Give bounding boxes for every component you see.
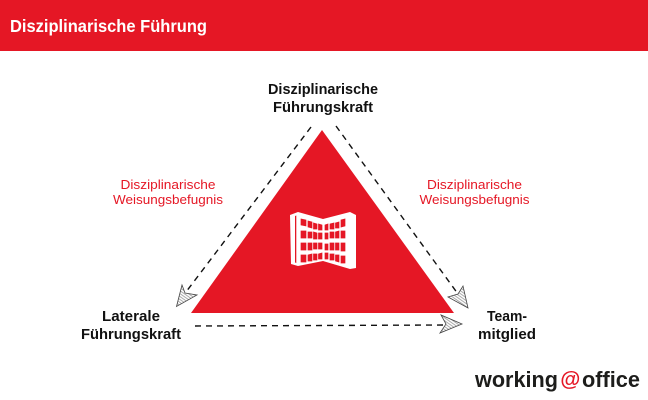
heading: left node: Laterale — [102, 308, 160, 325]
label: right edge — [420, 177, 530, 207]
header bar — [0, 0, 648, 51]
arrow: top to right — [336, 126, 468, 308]
arrow: left to right — [195, 315, 462, 333]
heading: top node — [268, 81, 378, 116]
label: left edge: Disziplinarische — [120, 177, 216, 192]
heading: right node — [478, 308, 536, 343]
logo: working@office: @ — [560, 369, 580, 391]
label: left edge: Weisungsbefugnis — [113, 192, 224, 207]
icon: building — [290, 212, 356, 269]
heading: left node: Führungskraft — [81, 326, 181, 343]
label: right edge: Weisungsbefugnis — [420, 192, 530, 207]
label: left edge — [113, 177, 224, 207]
heading: top node: Führungskraft — [273, 99, 373, 116]
heading: right node: Team- — [487, 308, 527, 325]
logo: working@office: working — [474, 367, 558, 392]
central red triangle — [191, 130, 454, 313]
arrow: top to left — [176, 127, 311, 306]
logo: working@office: office — [582, 367, 640, 392]
heading: top node: Disziplinarische — [268, 81, 378, 98]
title: Disziplinarische Führung — [10, 16, 207, 36]
label: right edge: Disziplinarische — [427, 177, 522, 192]
heading: right node: mitglied — [478, 326, 536, 343]
logo: working@office — [474, 367, 640, 392]
heading: left node — [81, 308, 181, 343]
